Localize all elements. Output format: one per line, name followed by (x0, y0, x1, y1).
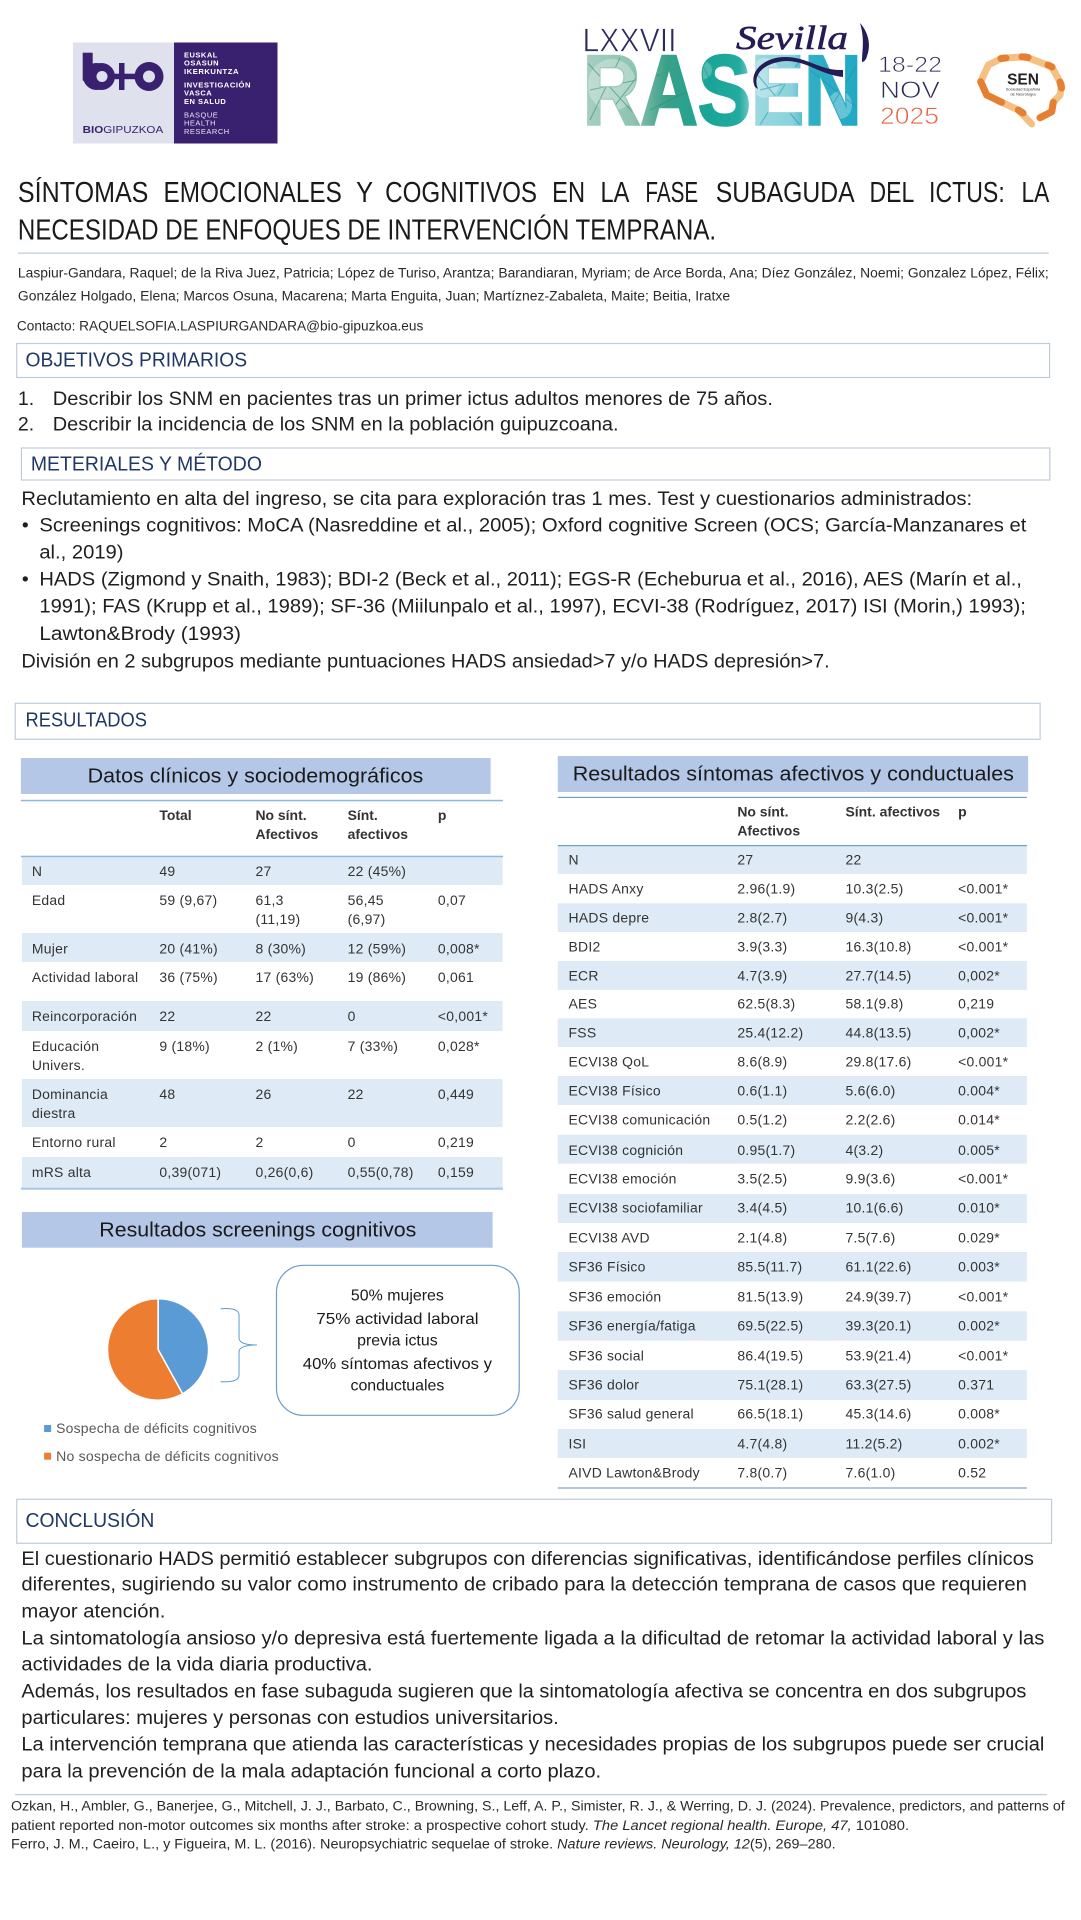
text: conclusión: diferentes, sugiriendo su valor como instrumento de cribado para la detección temprana de casos que requieren (21, 1574, 1027, 1596)
table rows: N (569, 851, 579, 867)
table rows: 4(3.2) (846, 1142, 883, 1158)
table rows: 27 (255, 863, 271, 879)
wordmark: Biogipuzkoa: BIO GIPUZKOA (83, 125, 164, 136)
table rows: 2 (1%) (255, 1038, 298, 1054)
table rows: 0,219 (958, 996, 994, 1012)
table rows (32, 863, 488, 1180)
institution text: INVESTIGACIÓN (184, 80, 251, 89)
institution text: EUSKAL (184, 51, 218, 60)
title: EN (552, 177, 585, 209)
table rows: 3.5(2.5) (737, 1170, 787, 1186)
logo: LXXVII RASEN Sevilla (585, 23, 940, 127)
table rows: 0.003* (958, 1259, 1000, 1275)
title: COGNITIVOS (385, 177, 537, 209)
table rows: 0.008* (958, 1406, 1000, 1422)
table rows: 0,39(071) (159, 1164, 221, 1180)
table rows: 29.8(17.6) (846, 1053, 912, 1069)
text: método: 1991); FAS (Krupp et al., 1989); SF-36 (Miilunpalo et al., 1997), ECVI-38 (Rodríguez, 2017) ISI (Morin,) 1993); (39, 595, 1026, 617)
title: EMOCIONALES (164, 177, 342, 209)
SEN wordmark: SEN (1007, 71, 1039, 88)
logo: Biogipuzkoa (73, 42, 278, 144)
table rows: Educación (32, 1038, 99, 1054)
table rows: 48 (159, 1086, 175, 1102)
section: conclusión: CONCLUSIÓN (25, 1509, 154, 1532)
table rows: <0.001* (958, 880, 1009, 896)
table rows: SF36 salud general (569, 1406, 694, 1422)
text: método (21, 488, 1027, 672)
authors: Laspiur-Gandara, Raquel; de la Riva Juez, Patricia; López de Turiso, Arantza; Barandiaran, Myriam; de Arce Borda, Ana; Díez González, Noemi; Gonzalez López, Félix; (18, 264, 1049, 280)
table rows: 53.9(21.4) (846, 1348, 912, 1364)
table rows: 22 (159, 1008, 175, 1024)
table rows: 20 (41%) (159, 940, 218, 956)
text: conclusión: para la prevención de la mala adaptación funcional a corto plazo. (21, 1760, 601, 1782)
swoosh (753, 23, 869, 89)
heading bar: síntomas: Resultados síntomas afectivos y conductuales (573, 764, 1014, 786)
table rows: 22 (45%) (348, 863, 406, 879)
table rows: 44.8(13.5) (846, 1024, 912, 1040)
table rows: 9.9(3.6) (846, 1170, 896, 1186)
heading bar: datos clínicos (21, 758, 491, 794)
table rows: 0,07 (438, 892, 466, 908)
table rows: <0.001* (958, 1170, 1009, 1186)
legend (44, 1420, 279, 1464)
callout: conductuales (350, 1378, 444, 1395)
text: conclusión: actividades de la vida diaria productiva. (21, 1654, 373, 1676)
table rows: (6,97) (348, 911, 386, 927)
table rows: BDI2 (569, 939, 601, 955)
title: ICTUS: (929, 177, 1005, 209)
text: método: HADS (Zigmond y Snaith, 1983); BDI-2 (Beck et al., 2011); EGS-R (Echeburua et al., 2016), AES (Marín et al., (39, 569, 1022, 591)
institution text: RESEARCH (184, 127, 230, 136)
text: método: Lawton&Brody (1993) (39, 623, 241, 645)
table rows: 56,45 (348, 892, 384, 908)
table header: Afectivos (737, 823, 800, 839)
references (11, 1798, 1065, 1852)
table rows: 17 (63%) (255, 969, 314, 985)
table rows: 75.1(28.1) (737, 1377, 803, 1393)
table rows: 3.4(4.5) (737, 1200, 787, 1216)
table rows: 59 (9,67) (159, 892, 217, 908)
table rows: 2.96(1.9) (737, 880, 795, 896)
table rows: ECVI38 comunicación (569, 1112, 710, 1128)
icon: brain outline (981, 57, 1062, 124)
section: resultados (15, 703, 1040, 739)
table rows: 0,55(0,78) (348, 1164, 414, 1180)
dates (878, 52, 942, 130)
LXXVII numeral: LXXVII (582, 22, 676, 59)
table rows: 2.8(2.7) (737, 910, 787, 926)
table rows: ISI (569, 1435, 586, 1451)
table rows: 22 (846, 851, 862, 867)
table header: No sínt. (737, 804, 788, 820)
text: conclusión: El cuestionario HADS permitió establecer subgrupos con diferencias significativas, identificándose perfiles clínicos (21, 1548, 1034, 1570)
table rows: 10.1(6.6) (846, 1200, 904, 1216)
table rows: 2 (159, 1134, 167, 1150)
table rows: 16.3(10.8) (846, 939, 912, 955)
table rows: 0.002* (958, 1435, 1000, 1451)
section: materiales y método (21, 448, 1050, 480)
authors: González Holgado, Elena; Marcos Osuna, Macarena; Marta Enguita, Juan; Martíznez-Zabaleta, Maite; Beitia, Iratxe (18, 288, 730, 304)
table rows: Actividad laboral (32, 969, 138, 985)
table header: p (438, 807, 446, 823)
table rows: 19 (86%) (348, 969, 406, 985)
title: LA (1021, 177, 1050, 209)
table rows: 61.1(22.6) (846, 1259, 912, 1275)
section: conclusión (17, 1499, 1052, 1543)
table rows: 2.2(2.6) (846, 1112, 896, 1128)
table rows: 0.014* (958, 1112, 1000, 1128)
table rows: SF36 energía/fatiga (569, 1318, 696, 1334)
table rows: 9(4.3) (846, 910, 883, 926)
heading bar: screenings (22, 1212, 493, 1248)
text: método: Reclutamiento en alta del ingreso, se cita para exploración tras 1 mes. Test y cuestionarios administrados: (21, 488, 972, 510)
text: conclusión: Además, los resultados en fase subaguda sugieren que la sintomatología afectiva se concentra en dos subgrupos (21, 1680, 1027, 1702)
table rows: 49 (159, 863, 175, 879)
table rows (569, 851, 1009, 1481)
title (18, 176, 1050, 247)
table header: Sínt. (348, 807, 378, 823)
table header (159, 807, 446, 842)
table rows: 12 (59%) (348, 940, 406, 956)
table rows: 0,219 (438, 1134, 474, 1150)
panel: datos clínicos y sociodemográficos (21, 758, 503, 1190)
SEN subtitle: Sociedad Española (1006, 87, 1041, 92)
table rows: 0 (348, 1134, 356, 1150)
heading bar: datos clínicos: Datos clínicos y sociodemográficos (88, 766, 423, 788)
table rows: 0,008* (438, 940, 480, 956)
text: conclusión: mayor atención. (21, 1600, 165, 1622)
logo: SEN (981, 57, 1062, 124)
table rows: 0.029* (958, 1230, 1000, 1246)
table rows: 25.4(12.2) (737, 1024, 803, 1040)
text: conclusión (21, 1548, 1045, 1782)
table rows: <0.001* (958, 910, 1009, 926)
table rows: 0.95(1.7) (737, 1142, 795, 1158)
table header (737, 804, 967, 839)
table rows: 0.010* (958, 1200, 1000, 1216)
table rows: 24.9(39.7) (846, 1289, 912, 1305)
dates: NOV (880, 77, 940, 104)
dates: 2025 (880, 103, 939, 130)
table rows: 4.7(4.8) (737, 1435, 787, 1451)
table rows: SF36 dolor (569, 1377, 639, 1393)
section: objetivos primarios (17, 344, 1050, 378)
dates: 18-22 (878, 52, 942, 77)
table rows: diestra (32, 1105, 75, 1121)
institution text: VASCA (184, 89, 212, 98)
institution text (184, 51, 251, 136)
title: DEL (870, 177, 914, 209)
table rows: 7.5(7.6) (846, 1230, 896, 1246)
table rows: Reincorporación (32, 1008, 137, 1024)
table: datos clínicos (21, 800, 503, 1190)
references: patient reported non-motor outcomes six months after stroke: a prospective cohort study. The Lancet regional health. Europe, 47, 101080. (11, 1817, 909, 1833)
table rows: <0.001* (958, 1053, 1009, 1069)
legend: No sospecha de déficits cognitivos (56, 1448, 279, 1464)
table rows: 0,028* (438, 1038, 480, 1054)
table header: Total (159, 807, 192, 823)
table header: Afectivos (255, 826, 318, 842)
table rows: 39.3(20.1) (846, 1318, 912, 1334)
table rows: Entorno rural (32, 1134, 116, 1150)
table rows: 22 (255, 1008, 271, 1024)
references: Ferro, J. M., Caeiro, L., y Figueira, M. L. (2016). Neuropsychiatric sequelae of stroke. Nature reviews. Neurology, 12 (5), 269–280. (11, 1836, 836, 1852)
title: SUBAGUDA (716, 177, 855, 209)
institution text: BASQUE (184, 111, 218, 120)
text: método: Screenings cognitivos: MoCA (Nasreddine et al., 2005); Oxford cognitive Screen (OCS; García-Manzanares et (39, 515, 1027, 537)
table rows: <0,001* (438, 1008, 488, 1024)
text: método: • (22, 515, 29, 537)
table rows: N (32, 863, 42, 879)
table rows: Mujer (32, 940, 68, 956)
SEN subtitle (1006, 87, 1041, 97)
table rows: 11.2(5.2) (846, 1435, 903, 1451)
table rows: Univers. (32, 1057, 85, 1073)
table rows: HADS depre (569, 910, 649, 926)
table rows: 3.9(3.3) (737, 939, 787, 955)
institution text: EN SALUD (184, 97, 226, 106)
table rows: 66.5(18.1) (737, 1406, 803, 1422)
table rows: 9 (18%) (159, 1038, 210, 1054)
callout (276, 1265, 519, 1415)
table rows: ECVI38 sociofamiliar (569, 1200, 703, 1216)
list: objetivos (18, 388, 773, 436)
table rows: AES (569, 996, 597, 1012)
institution text: OSASUN (184, 59, 219, 68)
heading bar: síntomas (558, 756, 1028, 792)
callout: 40% síntomas afectivos y (303, 1356, 492, 1373)
table header: Sínt. afectivos (846, 804, 940, 820)
table rows: 0.004* (958, 1082, 1000, 1098)
title: LA (600, 177, 630, 209)
table rows: mRS alta (32, 1164, 91, 1180)
title: Y (356, 177, 373, 209)
table rows: 8 (30%) (255, 940, 306, 956)
table rows: SF36 social (569, 1348, 644, 1364)
table rows: 0,26(0,6) (255, 1164, 314, 1180)
section: materiales y método: METERIALES Y MÉTODO (31, 453, 262, 476)
institution text: IKERKUNTZA (184, 67, 239, 76)
list: objetivos: Describir la incidencia de los SNM en la población guipuzcoana. (53, 414, 619, 436)
table rows: 7.6(1.0) (846, 1465, 896, 1481)
table rows: Dominancia (32, 1086, 108, 1102)
table rows: 7 (33%) (348, 1038, 398, 1054)
table rows: 10.3(2.5) (846, 880, 904, 896)
text: conclusión: La intervención temprana que atienda las características y necesidades propias de los subgrupos puede ser crucial (21, 1734, 1044, 1756)
heading bar: screenings: Resultados screenings cognitivos (99, 1220, 416, 1242)
table rows: 0,002* (958, 1024, 1000, 1040)
table rows: 2 (255, 1134, 263, 1150)
table rows: SF36 Físico (569, 1259, 646, 1275)
table rows: 61,3 (255, 892, 284, 908)
table rows: 0,002* (958, 968, 1000, 984)
list: objetivos: Describir los SNM en pacientes tras un primer ictus adultos menores de 75 años. (53, 388, 773, 410)
text: conclusión: particulares: mujeres y personas con estudios universitarios. (21, 1707, 559, 1729)
table: síntomas (558, 797, 1027, 1489)
table rows: (11,19) (255, 911, 300, 927)
panel: resultados síntomas afectivos y conductuales (558, 756, 1028, 1489)
table rows: 63.3(27.5) (846, 1377, 912, 1393)
table rows: 4.7(3.9) (737, 968, 787, 984)
table rows: ECVI38 emoción (569, 1170, 677, 1186)
title: NECESIDAD DE ENFOQUES DE INTERVENCIÓN TEMPRANA. (18, 213, 716, 247)
table rows: ECR (569, 968, 599, 984)
institution text: HEALTH (184, 119, 216, 128)
callout: 75% actividad laboral (316, 1311, 479, 1328)
list: objetivos: 1. (18, 388, 34, 410)
legend: Sospecha de déficits cognitivos (56, 1420, 257, 1436)
table rows: 7.8(0.7) (737, 1465, 787, 1481)
table rows: 0.002* (958, 1318, 1000, 1334)
contact: Contacto: RAQUELSOFIA.LASPIURGANDARA@bio-gipuzkoa.eus (17, 318, 423, 334)
table rows: <0.001* (958, 1348, 1009, 1364)
table rows: 0.371 (958, 1377, 994, 1393)
table rows: AIVD Lawton&Brody (569, 1465, 700, 1481)
table rows: ECVI38 AVD (569, 1230, 650, 1246)
table rows: Edad (32, 892, 65, 908)
table header: afectivos (348, 826, 408, 842)
text: método: al., 2019) (39, 541, 124, 563)
table rows: ECVI38 QoL (569, 1053, 649, 1069)
table rows: HADS Anxy (569, 880, 644, 896)
RASEN wordmark (587, 54, 858, 127)
table rows: 58.1(9.8) (846, 996, 904, 1012)
table rows: 2.1(4.8) (737, 1230, 787, 1246)
icon: b+o mark (83, 53, 164, 91)
table rows: SF36 emoción (569, 1289, 661, 1305)
pie chart (108, 1299, 209, 1400)
table rows: 0,159 (438, 1164, 474, 1180)
text: método: • (22, 569, 29, 591)
table header: No sínt. (255, 807, 307, 823)
table rows: 5.6(6.0) (846, 1082, 896, 1098)
table rows: 27.7(14.5) (846, 968, 912, 984)
callout: previa ictus (357, 1333, 438, 1350)
callout: 50% mujeres (351, 1288, 444, 1305)
table rows: <0.001* (958, 1289, 1009, 1305)
table rows: 62.5(8.3) (737, 996, 795, 1012)
table rows: 26 (255, 1086, 271, 1102)
table rows: 27 (737, 851, 753, 867)
table rows: 22 (348, 1086, 364, 1102)
table rows: ECVI38 Físico (569, 1082, 661, 1098)
title: FASE (645, 177, 698, 209)
RASEN wordmark: RASEN (583, 34, 862, 146)
table rows: FSS (569, 1024, 596, 1040)
authors (18, 264, 1049, 304)
table rows: 0.005* (958, 1142, 1000, 1158)
title: SÍNTOMAS (18, 176, 148, 209)
table rows: 0,449 (438, 1086, 474, 1102)
table rows: 36 (75%) (159, 969, 218, 985)
table rows: 69.5(22.5) (737, 1318, 803, 1334)
table rows: 0,061 (438, 969, 474, 985)
brace (221, 1309, 257, 1382)
table rows: 45.3(14.6) (846, 1406, 912, 1422)
table rows: 0.5(1.2) (737, 1112, 787, 1128)
text: conclusión: La sintomatología ansioso y/o depresiva está fuertemente ligada a la dificultad de retomar la actividad laboral y las (21, 1627, 1045, 1649)
section: resultados: RESULTADOS (25, 710, 147, 732)
table rows: 81.5(13.9) (737, 1289, 803, 1305)
list: objetivos: 2. (18, 414, 34, 436)
table rows: 8.6(8.9) (737, 1053, 787, 1069)
table rows: 0.52 (958, 1465, 986, 1481)
section: objetivos primarios: OBJETIVOS PRIMARIOS (25, 350, 247, 372)
Sevilla script: Sevilla (736, 20, 848, 57)
table rows: 0.6(1.1) (737, 1082, 787, 1098)
SEN subtitle: de Neurología (1010, 92, 1036, 97)
text: método: División en 2 subgrupos mediante puntuaciones HADS ansiedad>7 y/o HADS depresión>7. (21, 650, 830, 672)
table rows: 86.4(19.5) (737, 1348, 803, 1364)
panel: resultados screenings cognitivos (22, 1212, 519, 1464)
table header: p (958, 804, 967, 820)
table rows: 85.5(11.7) (737, 1259, 802, 1275)
references: Ozkan, H., Ambler, G., Banerjee, G., Mitchell, J. J., Barbato, C., Browning, S., Leff, A. P., Simister, R. J., & Werring, D. J. (2024). Prevalence, predictors, and patterns of (11, 1798, 1065, 1814)
table rows: ECVI38 cognición (569, 1142, 683, 1158)
table rows: <0.001* (958, 939, 1009, 955)
table rows: 0 (348, 1008, 356, 1024)
